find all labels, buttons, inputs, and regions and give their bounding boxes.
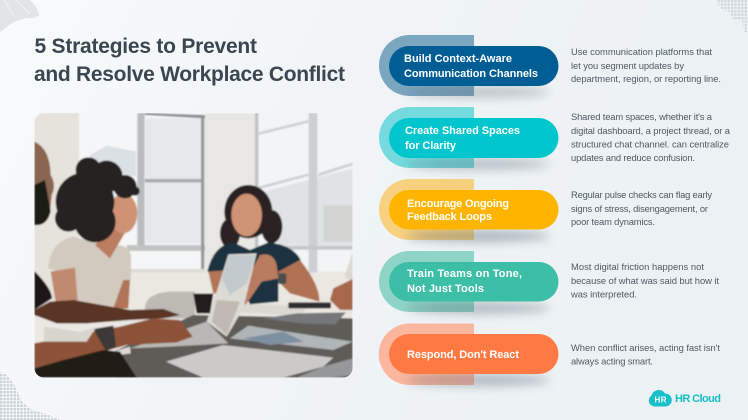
woman left: curly hair: [55, 157, 140, 242]
man: arms: [34, 300, 180, 323]
woman left: face: [109, 193, 137, 233]
logo: HR Cloud: [649, 390, 721, 407]
glass: [193, 294, 213, 313]
pill label: Train Teams on Tone,: [407, 268, 522, 280]
man: head and beard: [34, 142, 54, 222]
description 4: was interpreted.: [570, 288, 637, 300]
document tablet: [230, 326, 353, 350]
pill label: Build Context-Aware: [404, 53, 512, 65]
strategy 1: build context-aware channels: [379, 35, 558, 98]
description 5: When conflict arises, acting fast isn't: [571, 342, 720, 353]
photo: team meeting around a laptop: [34, 113, 353, 378]
icon: cloud: [649, 390, 672, 407]
pill label: Not Just Tools: [407, 283, 484, 295]
description 2: Shared team spaces, whether it's a: [571, 111, 713, 122]
pill label: Create Shared Spaces: [405, 125, 520, 137]
pill back shape: [379, 251, 474, 312]
notebook: [239, 304, 308, 316]
description 1: Use communication platforms that: [571, 46, 712, 57]
pill label: Encourage Ongoing: [407, 198, 509, 210]
pill label: Respond, Don't React: [407, 349, 519, 361]
description 2: structured chat channel. can centralize: [571, 138, 729, 150]
pill label: [389, 118, 558, 158]
title: 5 Strategies to Prevent: [34, 35, 257, 58]
description 4: [570, 261, 719, 300]
pill label: Communication Channels: [404, 68, 538, 80]
description 2: updates and reduce confusion.: [571, 152, 695, 163]
pill label: Feedback Loops: [407, 211, 492, 223]
logo: HR Cloud: HR: [654, 396, 667, 404]
hand at right edge: [346, 253, 352, 280]
description 3: signs of stress, disengagement, or: [571, 203, 708, 214]
description 5: [571, 342, 720, 366]
laptop screen: [207, 253, 257, 337]
closed laptop on table: [166, 345, 333, 378]
strategy 5: respond, don't react: [379, 324, 558, 386]
description 2: digital dashboard, a project thread, or a: [571, 125, 731, 136]
woman right: face: [231, 194, 262, 236]
table: [113, 315, 353, 378]
strategy 4: train teams on tone: [379, 251, 558, 314]
pill back shape: [379, 107, 474, 168]
pill label: [389, 334, 558, 374]
description 4: because of what was said but how it: [571, 275, 719, 286]
strategy 2: create shared spaces: [379, 107, 558, 170]
laptop keyboard: [130, 322, 228, 348]
description 1: [571, 46, 721, 84]
pill label: [389, 190, 558, 230]
description 1: department, region, or reporting line.: [571, 73, 721, 84]
logo: HR Cloud: HR Cloud: [675, 393, 721, 405]
description 3: poor team dynamics.: [571, 216, 655, 227]
pill label: [389, 46, 558, 86]
watch: [278, 273, 286, 284]
woman right: shirt: [207, 242, 301, 304]
description 1: let you segment updates by: [571, 60, 684, 71]
description 3: Regular pulse checks can flag early: [571, 189, 712, 200]
title: [34, 35, 345, 86]
pill back shape: [379, 35, 474, 96]
chair: [145, 292, 195, 318]
decoration: crumpled paper corner: [0, 0, 40, 32]
pill back shape: [379, 324, 474, 385]
woman right: hair: [220, 185, 282, 248]
strategy 3: encourage feedback loops: [379, 179, 558, 242]
description 2: [571, 111, 731, 163]
description 4: Most digital friction happens not: [571, 261, 704, 272]
woman right: arms: [208, 269, 224, 294]
decoration: bottom left dots: [0, 372, 60, 420]
man: shirt: [34, 271, 52, 310]
title: and Resolve Workplace Conflict: [34, 63, 345, 86]
description 5: always acting smart.: [571, 356, 653, 366]
pill back shape: [379, 179, 474, 240]
pill label: [389, 262, 558, 302]
woman left: shirt: [48, 237, 131, 308]
decoration: top right dots: [716, 0, 748, 32]
description 3: [571, 189, 712, 227]
pill label: for Clarity: [405, 140, 457, 152]
